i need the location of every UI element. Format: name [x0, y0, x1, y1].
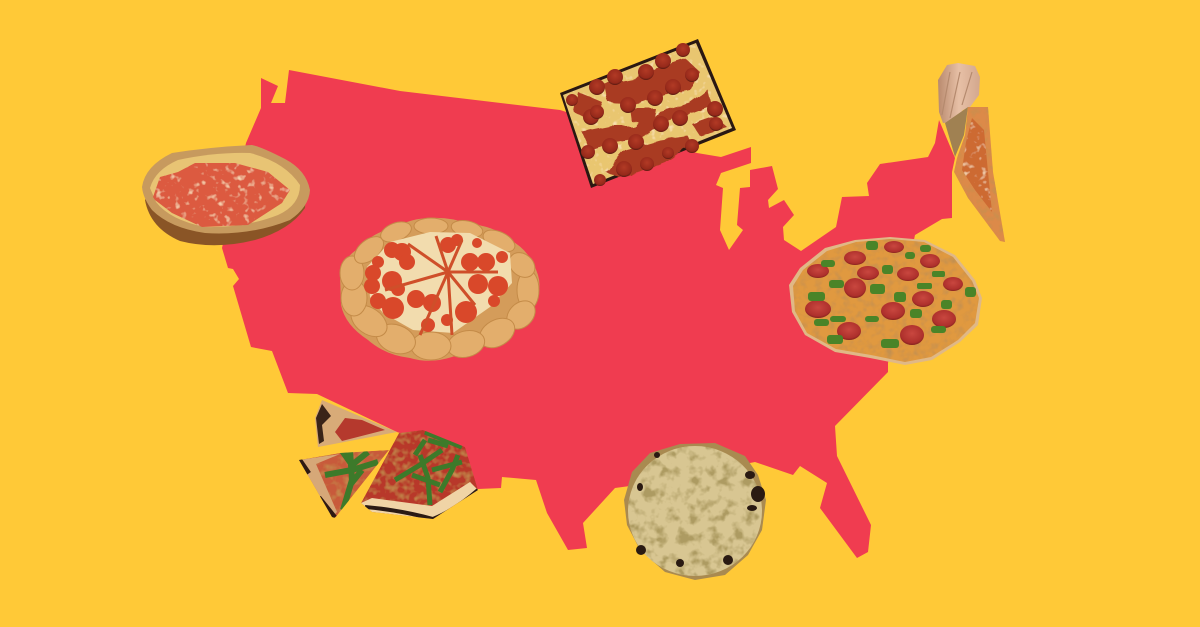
left slice	[297, 448, 389, 518]
right slice	[361, 430, 478, 519]
US map silhouette	[222, 70, 955, 558]
hand	[938, 63, 980, 123]
top slice	[315, 400, 397, 447]
pizza: Detroit rectangular pepperoni	[560, 39, 736, 188]
pepperoni	[566, 43, 723, 186]
slice cuts	[385, 236, 498, 335]
pepperoni	[805, 241, 963, 345]
pizza: deep dish, upper left	[142, 145, 310, 245]
slice	[954, 107, 1005, 242]
cheese centre	[367, 232, 512, 333]
infographic: pizza map of the United States	[142, 39, 1005, 580]
pizza: stuffed crust pepperoni, centre	[340, 218, 541, 361]
pepperoni slices	[364, 234, 508, 332]
melted cheese	[150, 153, 300, 227]
tomato sauce	[153, 163, 290, 227]
crumbled sausage	[574, 58, 728, 178]
crust lobes	[340, 218, 541, 361]
charred spots	[636, 452, 765, 567]
green peppers	[808, 241, 976, 348]
pizza: New York slice held by hand	[938, 63, 1005, 242]
pizza: white pie with toppings, bottom centre	[624, 443, 766, 580]
pizza: arugula slices, lower left	[297, 400, 478, 519]
pizza: pepperoni and green pepper, right	[789, 237, 982, 365]
